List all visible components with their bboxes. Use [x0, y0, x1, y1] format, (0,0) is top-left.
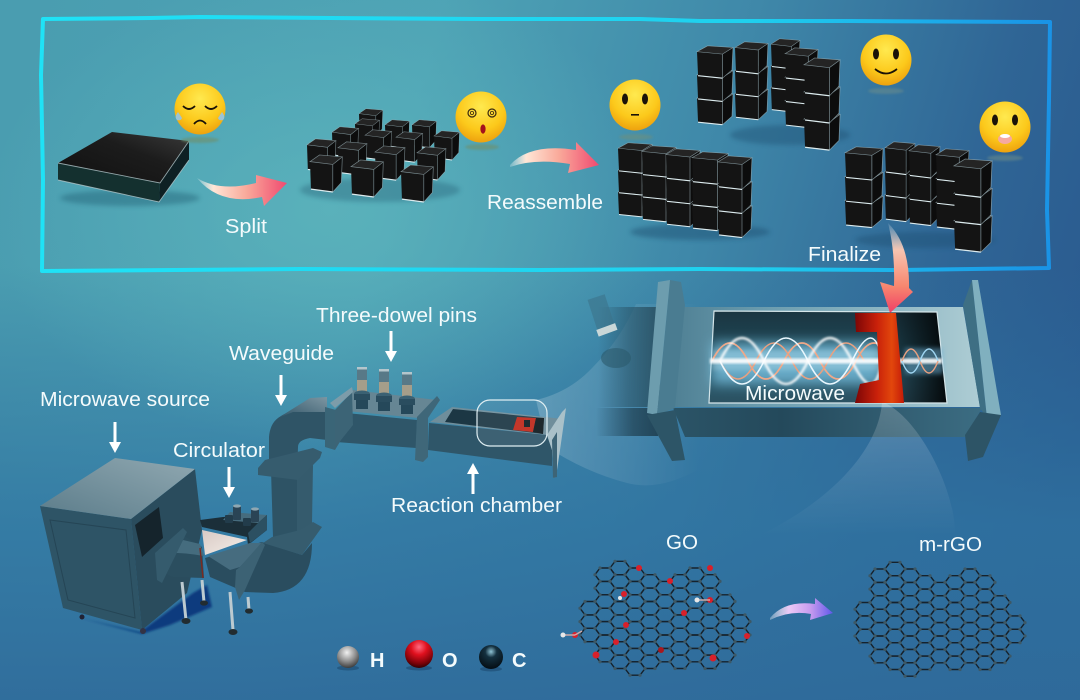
- arrow: to waveguide: [275, 375, 287, 406]
- right flange: [963, 280, 1001, 461]
- label: GO: GO: [666, 532, 698, 554]
- waveguide bottom elbow: [205, 542, 312, 600]
- atom O: O: [442, 650, 458, 672]
- stand legs: [182, 580, 253, 635]
- emoji: dizzy face: [456, 92, 506, 150]
- waveguide vertical: [263, 465, 322, 555]
- label: Finalize: Finalize: [808, 244, 881, 266]
- enlarged reaction chamber: [588, 280, 1001, 461]
- horizontal waveguide: [325, 387, 440, 462]
- arrow: GO to m-rGO: [770, 598, 833, 620]
- atom H: H: [370, 650, 384, 672]
- emoji: tongue face: [980, 102, 1030, 161]
- cube wall: zigzag: [697, 39, 850, 150]
- m-rGO lattice: [853, 561, 1027, 678]
- arrow: to pins: [385, 331, 397, 362]
- arrow: finalize: [880, 223, 913, 313]
- label: Three-dowel pins: Three-dowel pins: [316, 305, 477, 327]
- microwave source cabinet: [40, 458, 212, 634]
- frame border: [41, 17, 1050, 271]
- zoom highlight: [477, 400, 547, 446]
- label: m-rGO: m-rGO: [919, 534, 982, 556]
- circulator left arm: [162, 535, 204, 578]
- emoji: neutral face: [610, 80, 660, 140]
- emoji: crying face: [174, 84, 226, 143]
- arrow: to circulator: [223, 467, 235, 498]
- label: Microwave source: Microwave source: [40, 389, 210, 411]
- label: Circulator: Circulator: [173, 440, 265, 462]
- three dowel pins: [354, 367, 415, 414]
- label: Reaction chamber: Reaction chamber: [391, 495, 562, 517]
- waveguide top elbow: [258, 397, 327, 480]
- label: Waveguide: Waveguide: [229, 343, 334, 365]
- label: Split: Split: [225, 216, 267, 238]
- microwave system: [40, 367, 566, 635]
- label: Reassemble: Reassemble: [487, 192, 603, 214]
- arrow: reassemble: [510, 142, 599, 173]
- atom H: [337, 646, 384, 672]
- slab of material: [58, 132, 200, 206]
- circulator: [155, 504, 267, 583]
- arrow: split: [197, 175, 287, 206]
- legend: atoms: [337, 640, 526, 672]
- GO lattice: [560, 560, 752, 677]
- chamber front face: [673, 408, 982, 437]
- panel: assembly concept frame: [41, 17, 1050, 271]
- chamber top surface: [673, 307, 980, 407]
- reaction chamber: [428, 407, 566, 478]
- cube wall: flat: [618, 143, 770, 240]
- label: Microwave: Microwave: [745, 383, 845, 405]
- arrow: to reaction chamber: [467, 463, 479, 494]
- red sample block: [855, 313, 904, 403]
- atom C: [479, 645, 526, 672]
- cube wall: stepped: [845, 142, 995, 252]
- left flange: [647, 280, 685, 461]
- ghost waveguide with pin: [588, 294, 660, 436]
- circulator top block: [200, 515, 267, 545]
- zoom cone: sample to sheets: [720, 403, 955, 553]
- microwave waves: [710, 338, 943, 384]
- atom C: C: [512, 650, 526, 672]
- split cubes: [300, 109, 460, 202]
- circulator triangle: [202, 530, 247, 555]
- oxygen groups: [560, 565, 750, 662]
- emoji: smiling face: [860, 34, 912, 94]
- atom O: [405, 640, 458, 672]
- arrow: to microwave source: [109, 422, 121, 453]
- cavity: [709, 311, 947, 403]
- zoom cone: chamber detail: [536, 304, 703, 485]
